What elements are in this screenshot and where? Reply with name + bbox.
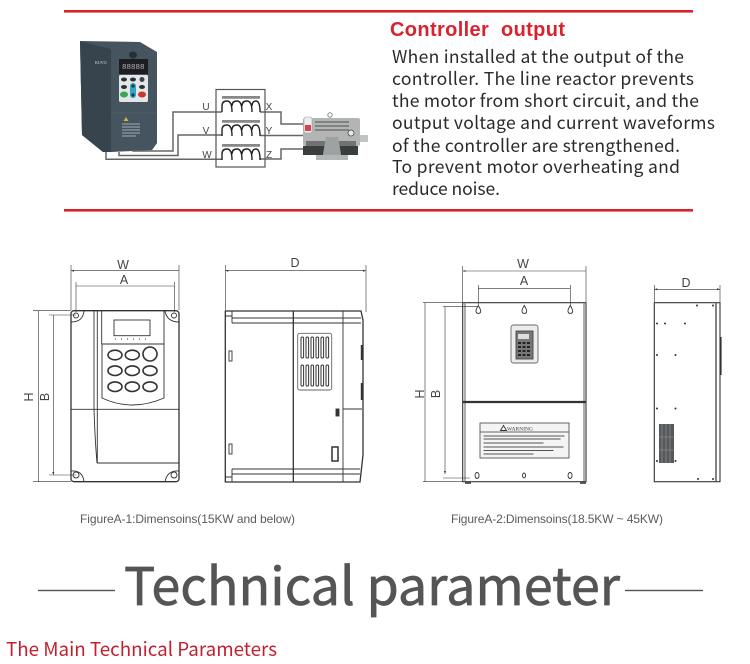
front view A-1 [71,311,179,482]
dimension labels A-2: W [517,257,529,271]
text block: description: reduce noise. [392,176,500,201]
icon: motor [303,113,368,160]
dimension labels A-2: B [429,390,443,398]
text block: description: of the controller are strengthened. [392,133,680,158]
dimension labels A-1: W [117,258,129,272]
text block: description: When installed at the output of the [392,44,684,69]
dimension line A-2 depth [654,288,720,290]
text block: description: the motor from short circuit, and the [392,88,699,113]
wire labels: V [203,126,210,137]
front view A-2 [463,303,586,483]
panel: controller output [64,10,715,212]
dimension labels A-2: H [413,389,427,399]
fan vents [659,424,674,463]
dimension labels A-2: A [520,274,529,288]
heading: main technical parameters: The Main Technical Parameters [6,635,277,662]
dimension labels A-2: D [681,276,691,290]
dimension labels A-1: H [22,392,36,402]
text block: description [392,44,715,201]
warning label: WARNING [507,426,533,432]
panel: figure A-2 dimensions [423,266,721,483]
wire labels: Y [266,126,273,137]
wire labels: X [266,102,273,113]
caption: figure A-2: FigureA-2:Dimensoins(18.5KW ~ 45KW) [451,512,663,526]
dimension lines A-1 front [33,265,179,482]
heading: controller output: Controller output [390,19,565,41]
wire labels [202,102,273,161]
dimension labels A-2 [413,257,691,399]
icon: controller unit: 88888 [122,64,145,72]
panel: figure A-1 dimensions [33,265,366,482]
keypad [511,325,538,363]
text block: description: output voltage and current waveforms [392,110,715,135]
dimension labels A-1: D [290,256,300,270]
diagram: line reactor wiring [106,90,303,167]
text block: description: controller. The line reactor prevents [392,66,694,91]
reactor coils [222,96,260,160]
icon: controller unit: KUVO [95,60,107,65]
title: technical parameter: Technical parameter [124,545,621,620]
dimension labels A-1: A [120,273,129,287]
dimension labels A-1 [22,256,300,402]
wire labels: U [202,102,210,113]
caption: figure A-1: FigureA-1:Dimensoins(15KW and below) [80,512,295,526]
dimension lines A-2 front [423,266,586,482]
icon: controller unit [80,41,157,152]
dimension line A-1 depth [225,270,366,272]
dimension labels A-1: B [38,393,52,401]
text block: description: To prevent motor overheating and [392,154,680,179]
side view A-2 [654,303,721,482]
wire labels: W [202,150,212,161]
wire labels: Z [266,150,272,161]
side view A-1 [225,311,363,482]
warning label [480,423,569,458]
